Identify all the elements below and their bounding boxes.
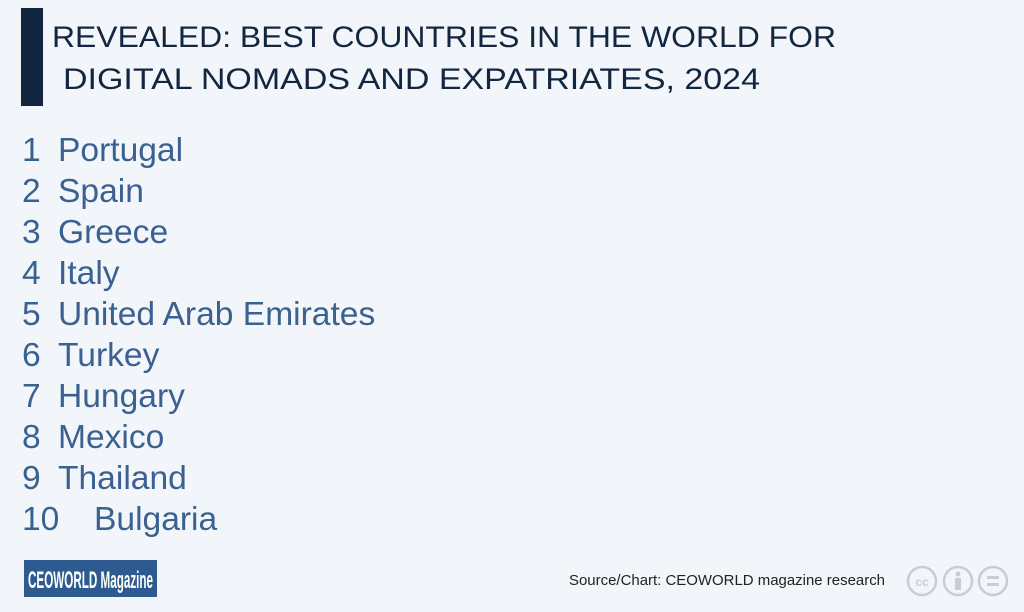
ranked list: United Arab Emirates (58, 296, 375, 333)
ranked list: Italy (58, 255, 120, 292)
ranked list: Thailand (58, 460, 187, 497)
ranked list: 1 (22, 132, 41, 169)
ranked list: 9 (22, 460, 41, 497)
ranked list: Bulgaria (94, 501, 217, 538)
ranked list: Spain (58, 173, 144, 210)
ranked list: Mexico (58, 419, 164, 456)
ranked list: Hungary (58, 378, 185, 415)
icons: license (906, 566, 1008, 596)
ranked list: 2 (22, 173, 41, 210)
icons: license: cc (915, 575, 929, 589)
title accent bar (21, 8, 43, 106)
ranked list (22, 132, 375, 538)
title: DIGITAL NOMADS AND EXPATRIATES, 2024 (63, 63, 760, 96)
title (52, 21, 836, 96)
title: REVEALED: BEST COUNTRIES IN THE WORLD FOR (52, 21, 836, 54)
ranked list: 5 (22, 296, 41, 333)
ranked list: 10 (22, 501, 59, 538)
ranked list: 8 (22, 419, 41, 456)
ranked list: 7 (22, 378, 41, 415)
ranked list: Greece (58, 214, 168, 251)
source: Source/Chart: CEOWORLD magazine research (569, 572, 885, 589)
ranked list: 4 (22, 255, 41, 292)
ranked list: Portugal (58, 132, 183, 169)
ranked list: 6 (22, 337, 41, 374)
ranked list: 3 (22, 214, 41, 251)
ranked list: Turkey (58, 337, 159, 374)
